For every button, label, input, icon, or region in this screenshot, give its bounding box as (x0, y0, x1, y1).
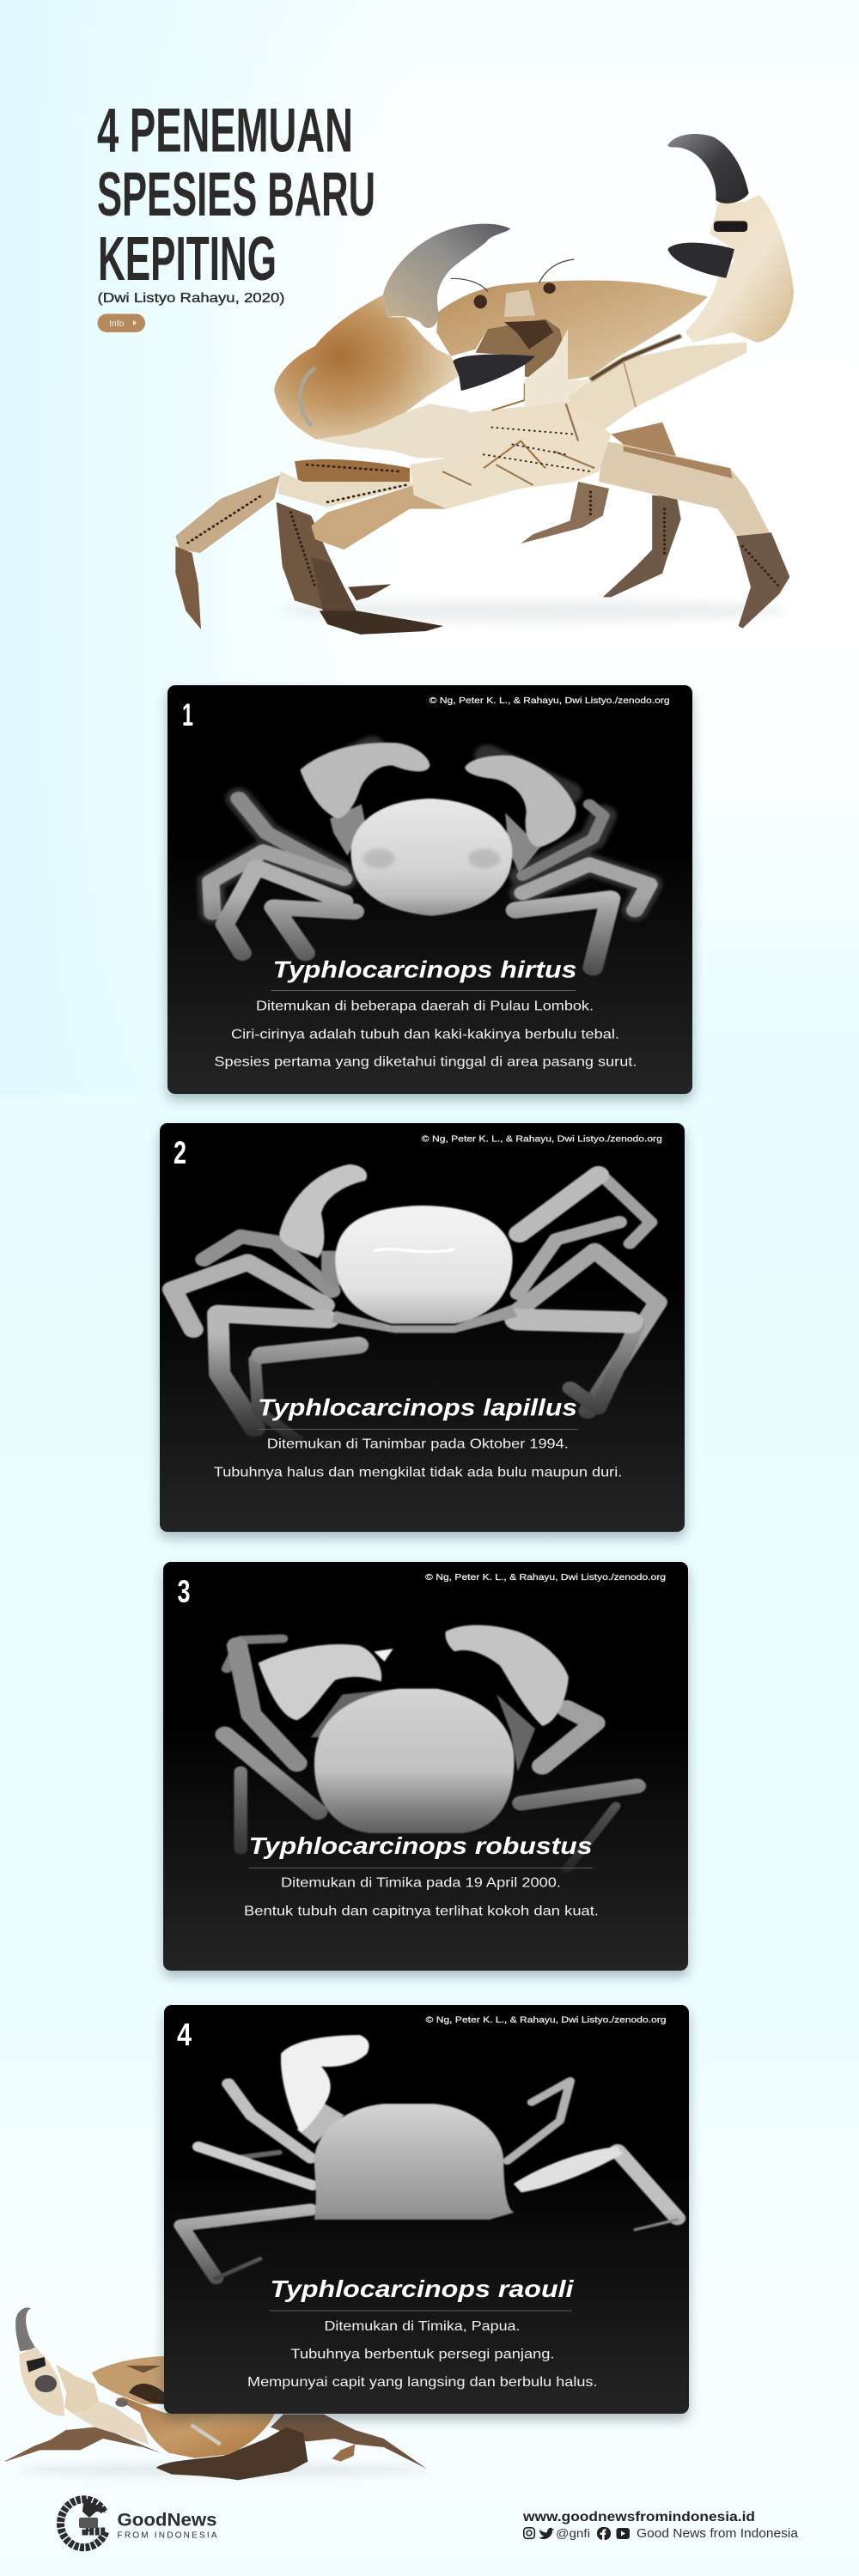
card 4 text (177, 2014, 666, 2390)
description 3: Ditemukan di Timika pada 19 April 2000. (281, 1876, 561, 1891)
info button (98, 314, 145, 332)
title: KEPITING (98, 225, 277, 294)
icon: facebook (597, 2527, 611, 2541)
left claw arm (315, 404, 484, 458)
handle: @gnfi (556, 2526, 590, 2540)
website and social links (522, 2510, 799, 2541)
info button: Info (109, 319, 125, 329)
right claw upper finger (667, 134, 749, 204)
wordmark: FROM INDONESIA (117, 2531, 217, 2541)
number 1: 1 (182, 697, 193, 732)
left claw dark finger (453, 355, 535, 391)
icon: youtube (617, 2528, 630, 2539)
page name: Good News from Indonesia (637, 2527, 799, 2541)
card 2 background (160, 1123, 685, 1532)
species name 2: Typhlocarcinops lapillus (258, 1394, 577, 1420)
description 2: Tubuhnya halus dan mengkilat tidak ada bulu maupun duri. (214, 1465, 622, 1479)
back legs (277, 422, 681, 614)
description 2: Ditemukan di Tanimbar pada Oktober 1994. (267, 1437, 569, 1452)
number 3: 3 (177, 1574, 191, 1609)
title: SPESIES BARU (97, 161, 375, 229)
crab photo 4 (173, 2033, 687, 2285)
card 3 text (177, 1572, 666, 1919)
right claw palm (685, 195, 794, 343)
card 3 background (163, 1562, 688, 1971)
credit 1: © Ng, Peter K. L., & Rahayu, Dwi Listyo./zenodo.org (430, 696, 670, 706)
crab photo 3 (215, 1625, 647, 1873)
left claw palm (274, 295, 459, 440)
panel: species 3 (163, 1562, 688, 1971)
right arm (568, 336, 746, 429)
description 1 (214, 999, 637, 1070)
card 2 text (174, 1133, 662, 1479)
species name 3: Typhlocarcinops robustus (249, 1832, 593, 1859)
credit 4: © Ng, Peter K. L., & Rahayu, Dwi Listyo./zenodo.org (425, 2014, 666, 2025)
panel: species 4 (163, 2004, 689, 2413)
subtitle: source: (Dwi Listyo Rahayu, 2020) (98, 291, 285, 306)
website url: www.goodnewsfromindonesia.id (522, 2510, 755, 2524)
panel: species 2 (160, 1123, 685, 1532)
credit 2: © Ng, Peter K. L., & Rahayu, Dwi Listyo./zenodo.org (422, 1133, 662, 1144)
title: 4 PENEMUAN (97, 96, 353, 165)
crab photo 1 (196, 735, 663, 976)
description 4: Ditemukan di Timika, Papua. (324, 2318, 520, 2333)
species name 4: Typhlocarcinops raouli (270, 2275, 574, 2301)
icon: G emblem (61, 2498, 106, 2548)
card 1 background (168, 685, 692, 1094)
right claw lower finger (667, 243, 734, 278)
number 2: 2 (174, 1135, 186, 1170)
crab photo 2 (161, 1163, 668, 1444)
underside body (410, 383, 611, 509)
description 4: Mempunyai capit yang langsing dan berbulu halus. (247, 2375, 597, 2390)
credit 3: © Ng, Peter K. L., & Rahayu, Dwi Listyo./zenodo.org (425, 1572, 666, 1583)
icon: bottom crab photo (4, 2307, 426, 2480)
icon: twitter (539, 2528, 554, 2539)
description 3: Bentuk tubuh dan capitnya terlihat kokoh dan kuat. (244, 1905, 599, 1919)
card 1 text (182, 696, 670, 1070)
icon: hero crab photo (175, 134, 794, 635)
logo: GoodNews from Indonesia (57, 2495, 217, 2552)
title (97, 96, 375, 294)
number 4: 4 (177, 2017, 192, 2052)
description 2 (214, 1437, 622, 1479)
description 1: Ditemukan di beberapa daerah di Pulau Lombok. (256, 999, 594, 1014)
description 1: Ciri-cirinya adalah tubuh dan kaki-kakinya berbulu tebal. (231, 1027, 619, 1042)
wordmark (117, 2511, 217, 2541)
description 4 (247, 2318, 597, 2390)
wordmark: GoodNews (117, 2511, 216, 2530)
card 4 background (163, 2004, 689, 2413)
ground shadow (278, 600, 788, 622)
front legs (175, 441, 789, 635)
icon: instagram (524, 2528, 534, 2538)
panel: species 1 (168, 685, 692, 1094)
description 3 (244, 1876, 599, 1919)
species name 1: Typhlocarcinops hirtus (273, 956, 577, 982)
description 1: Spesies pertama yang diketahui tinggal di area pasang surut. (214, 1055, 637, 1070)
left claw upper finger (383, 224, 510, 328)
description 4: Tubuhnya berbentuk persegi panjang. (290, 2347, 554, 2361)
carapace (436, 259, 708, 407)
ground shadow (17, 2464, 430, 2476)
